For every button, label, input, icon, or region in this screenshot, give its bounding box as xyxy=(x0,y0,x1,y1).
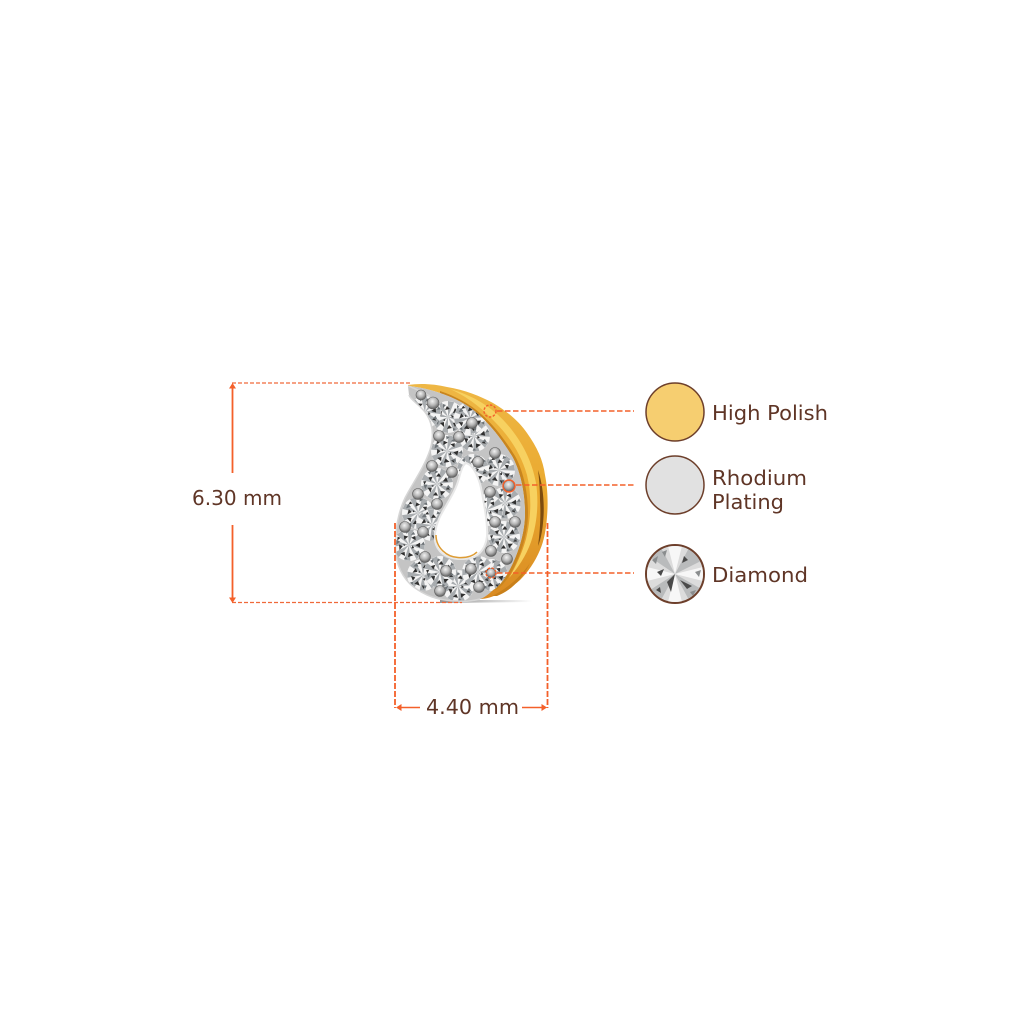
legend: rhodium plating: Rhodium xyxy=(712,466,807,490)
legend: rhodium plating: Plating xyxy=(712,490,784,514)
ground shadow xyxy=(440,600,532,603)
diamonds xyxy=(396,396,521,600)
legend: diamond: Diamond xyxy=(712,563,808,587)
gold band xyxy=(408,384,548,599)
legend: rhodium plating xyxy=(646,456,807,514)
gold inner rim of hole xyxy=(436,535,477,558)
jewel: paisley pendant xyxy=(386,384,548,607)
width dimension: 4.40 mm xyxy=(395,523,548,719)
callout: high polish leader xyxy=(484,405,634,417)
height dimension: 6.30 mm xyxy=(192,383,462,603)
width label: 4.40 mm xyxy=(426,695,519,719)
legend: high polish: High Polish xyxy=(712,401,828,425)
pave silver body with hole xyxy=(395,386,525,601)
legend: high polish xyxy=(646,383,828,441)
legend: diamond xyxy=(646,545,808,603)
metal beads xyxy=(400,390,520,596)
height label: 6.30 mm xyxy=(192,486,282,510)
hole rim xyxy=(435,463,487,559)
callout: rhodium leader xyxy=(503,480,634,492)
silver rim xyxy=(395,386,480,601)
callout: diamond leader xyxy=(486,568,634,578)
